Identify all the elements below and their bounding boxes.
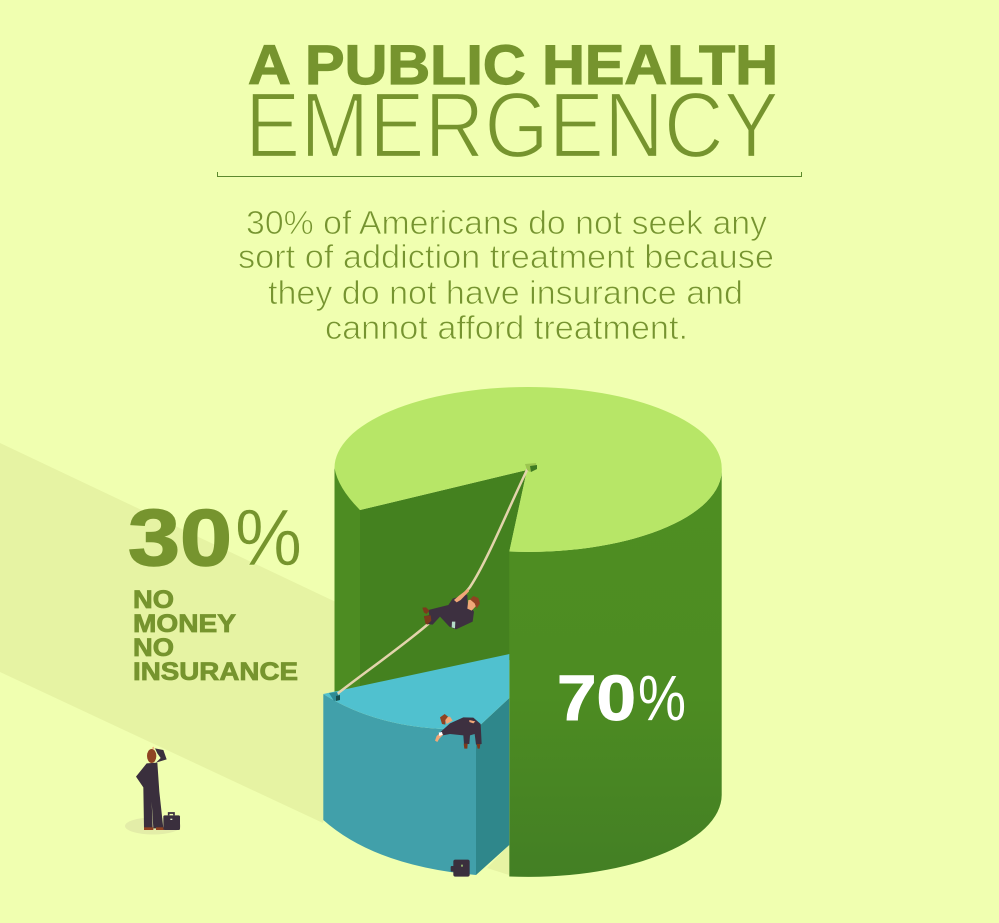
stat: 30 percent	[128, 493, 302, 582]
stat: 30 percent: %	[235, 493, 302, 582]
label: no money no insurance: NO	[133, 586, 174, 614]
icon: rope anchor bottom	[329, 692, 340, 701]
slice front face	[323, 694, 476, 875]
pie cylinder: 70 percent body	[334, 387, 722, 877]
stat: 70 percent	[557, 662, 686, 734]
description text: they do not have insurance and	[268, 274, 743, 311]
figure: lying man	[435, 714, 482, 749]
stat: 70 percent: 70	[557, 662, 636, 734]
icon: rope anchor top	[525, 463, 537, 472]
shadow under standing man	[125, 818, 181, 834]
title	[245, 33, 779, 177]
description text: sort of addiction treatment because	[238, 238, 774, 275]
icon: fallen briefcase	[451, 860, 470, 877]
title: A PUBLIC HEALTH	[248, 33, 778, 96]
title divider	[218, 172, 802, 176]
icon: briefcase	[163, 813, 180, 830]
label: no money no insurance	[133, 586, 298, 686]
figure: climbing man	[422, 589, 480, 629]
cut inner wall	[360, 470, 527, 696]
slice top	[323, 654, 509, 729]
label: no money no insurance: NO	[133, 634, 174, 662]
beam sliver	[487, 845, 509, 875]
description text	[238, 204, 774, 346]
light beam	[0, 443, 340, 823]
label: no money no insurance: MONEY	[133, 610, 236, 638]
label: no money no insurance: INSURANCE	[133, 658, 298, 686]
pie slice: 30 percent teal	[323, 654, 509, 875]
top surface	[334, 387, 722, 552]
stat: 70 percent: %	[638, 662, 686, 734]
outer right wall	[509, 468, 722, 877]
slice right face	[476, 698, 509, 875]
back left wall	[334, 468, 360, 696]
stat: 30 percent: 30	[128, 493, 232, 582]
description text: 30% of Americans do not seek any	[246, 204, 768, 241]
title: EMERGENCY	[245, 73, 779, 177]
rope	[337, 468, 528, 694]
description text: cannot afford treatment.	[325, 309, 688, 346]
figure: standing man	[136, 747, 167, 830]
